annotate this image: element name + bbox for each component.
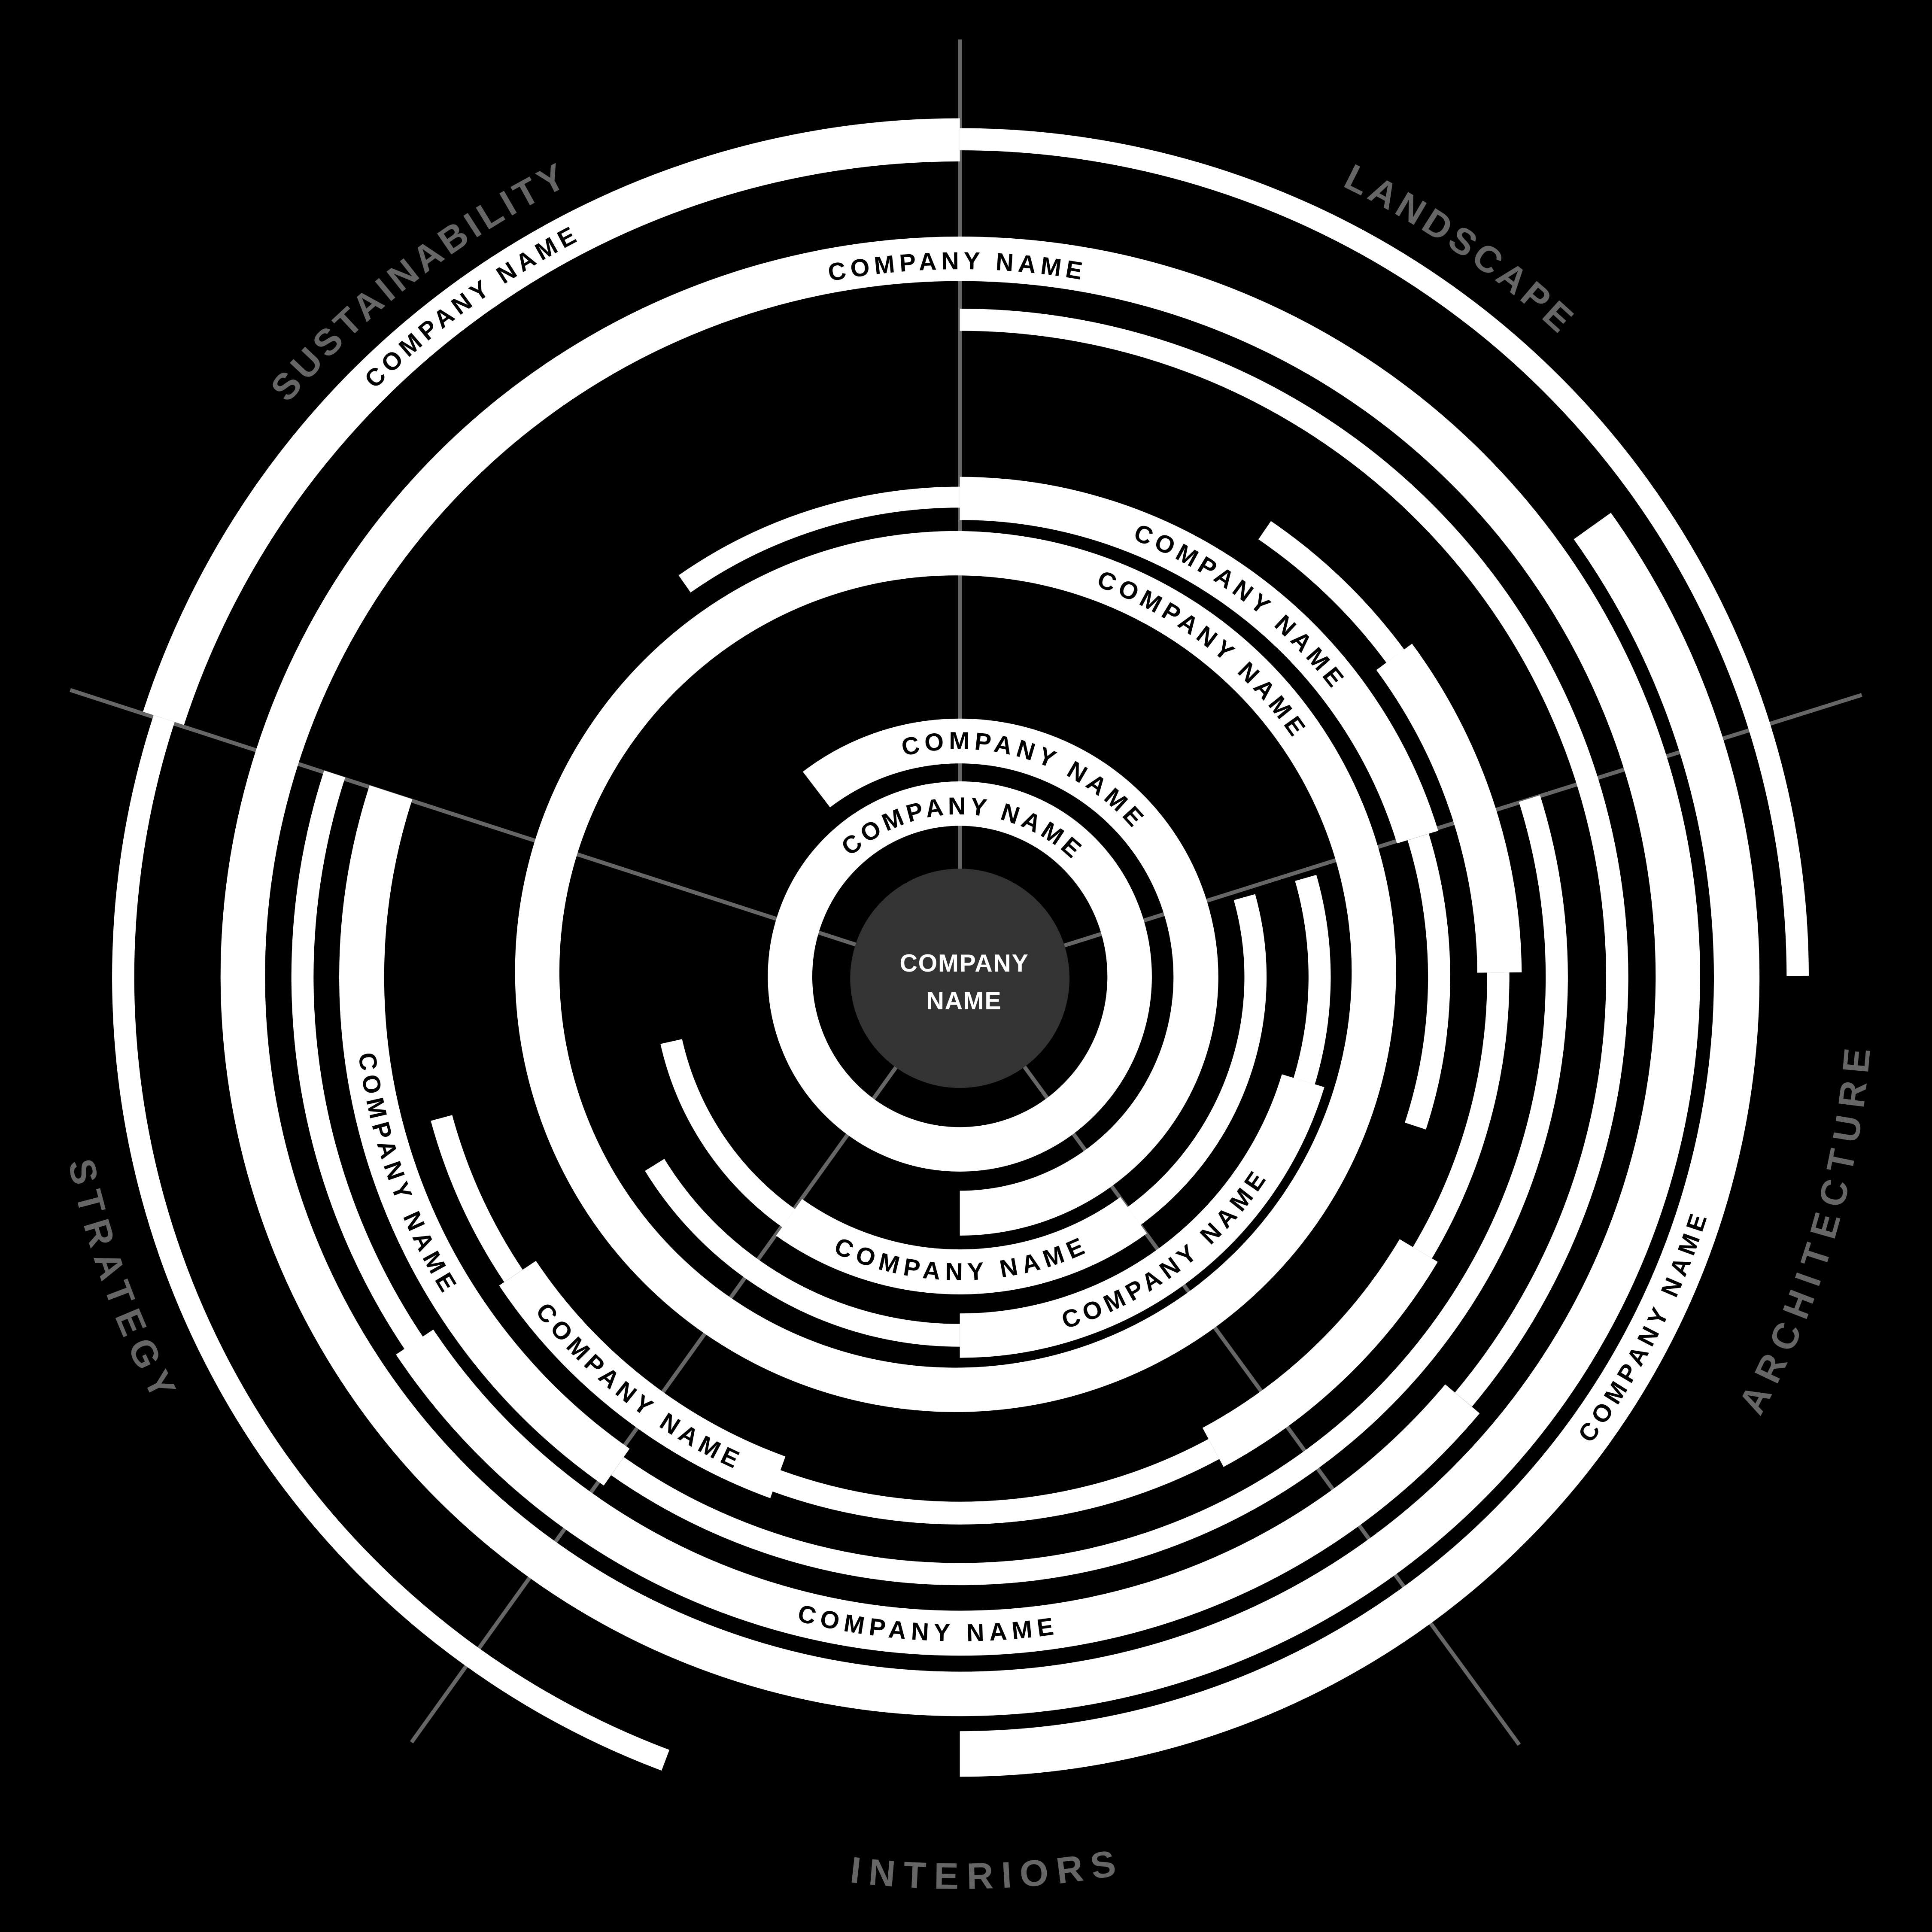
- ring 11: right to bottom arc: [960, 526, 1737, 1754]
- ring 7: thin upper right segment: [1265, 530, 1395, 656]
- ring 7: thick right segment: [1394, 657, 1500, 972]
- company label: ring 10 top: COMPANY NAME: [826, 247, 1089, 287]
- company label: ring 11 right: COMPANY NAME: [1571, 1203, 1723, 1452]
- ring 7: thick lower left segment: [517, 1273, 778, 1477]
- ring 10: full circle: [243, 259, 1678, 1694]
- sector heading: landscape: LANDSCAPE: [1334, 148, 1590, 346]
- ring 6: thin upper left segment: [685, 497, 960, 584]
- hub label: NAME: [926, 987, 1002, 1015]
- ring 9: thin top to lower right segment: [960, 320, 1617, 1400]
- sector heading: architecture: ARCHITECTURE: [1728, 1030, 1899, 1427]
- ring 4: thin right segment: [1304, 878, 1320, 1081]
- company label: ring 9 bottom: COMPANY NAME: [795, 1599, 1062, 1653]
- ring 4: thin lower left segment: [655, 1165, 960, 1335]
- ring 12: thick top left arc: [164, 140, 960, 718]
- company label: ring 6: COMPANY NAME: [1124, 504, 1363, 700]
- ring 7: thin lower right segment: [1422, 972, 1498, 1253]
- ring 8: thick left segment: [361, 792, 617, 1467]
- ring 1: full inner circle: [790, 804, 1130, 1149]
- ring 5: full offset circle: [537, 553, 1374, 1390]
- ring 7: thin left segment: [441, 1118, 513, 1276]
- company label: ring 4 lower right: COMPANY NAME: [1051, 1158, 1288, 1353]
- company label: ring 7 lower left: COMPANY NAME: [521, 1294, 752, 1488]
- ring 9: thin left segment: [303, 774, 413, 1343]
- hub label: COMPANY: [899, 950, 1029, 977]
- ring 3: thin right segment: [1134, 897, 1255, 1216]
- sector heading: strategy: STRATEGY: [52, 1150, 189, 1415]
- company label: ring 2: COMPANY NAME: [892, 698, 1163, 839]
- ring 3: thin left segment: [671, 1042, 789, 1218]
- ring 7: thin bottom segment: [777, 1449, 1214, 1513]
- ring 12: thin lower left arc: [123, 719, 665, 1760]
- company label: ring 5: COMPANY NAME: [1088, 549, 1326, 749]
- company label: ring 3 bottom: COMPANY NAME: [830, 1230, 1094, 1287]
- ring 6: thin right segment: [1416, 837, 1439, 1126]
- hub disc: [850, 869, 1069, 1088]
- ring 6: thick upper right segment: [960, 498, 1418, 837]
- ring 7: thick lower right segment: [1213, 1251, 1419, 1447]
- ring 8: thin right and bottom segment: [617, 799, 1557, 1574]
- ring 9: thick bottom segment: [415, 1342, 1462, 1633]
- company label: ring 12 upper left: COMPANY NAME: [353, 211, 587, 396]
- center hub: [850, 869, 1069, 1088]
- ring 4: thick lower right segment: [960, 1081, 1303, 1336]
- company label: ring 8 left: COMPANY NAME: [340, 1046, 466, 1305]
- sector heading: sustainability: SUSTAINABILITY: [251, 139, 581, 414]
- sector heading: interiors: INTERIORS: [847, 1841, 1127, 1901]
- ring 3: thick lower segment: [789, 1215, 1133, 1272]
- ring 12: thin top right arc: [960, 139, 1798, 976]
- company label: ring 1: COMPANY NAME: [836, 790, 1090, 866]
- ring 2: arc from upper left round to bottom: [817, 741, 1196, 1213]
